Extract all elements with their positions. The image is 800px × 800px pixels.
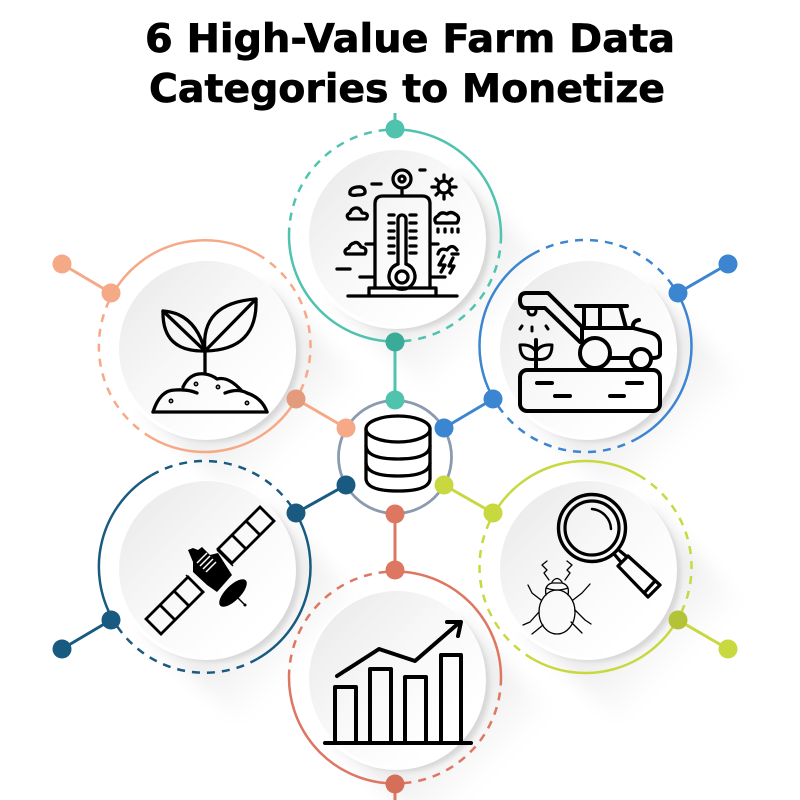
- center hub ring: [338, 400, 452, 514]
- panel: pest scouting data: [479, 461, 692, 673]
- icon: magnifying glass and beetle: [523, 494, 660, 634]
- icon: thermometer and weather: [337, 170, 459, 296]
- icon: satellite: [146, 507, 274, 634]
- long soft shadows behind the discs: [146, 177, 744, 800]
- panel: crop and soil data: [99, 240, 311, 452]
- title: Categories to Monetize: [149, 67, 665, 112]
- connector dots: [52, 120, 738, 794]
- panel: irrigation machinery data: [479, 240, 692, 452]
- title: 6 High-Value Farm Data: [145, 17, 675, 62]
- icon: tractor irrigating a field: [520, 293, 660, 411]
- panel: satellite data: [99, 461, 311, 673]
- panel: weather data: [289, 130, 501, 342]
- icon: database: [366, 416, 430, 491]
- icon: rising bar chart: [325, 622, 471, 743]
- icon: seedling in soil: [153, 299, 267, 412]
- panel: market trend data: [289, 572, 501, 784]
- title: [145, 17, 675, 112]
- connector lines: [62, 113, 728, 800]
